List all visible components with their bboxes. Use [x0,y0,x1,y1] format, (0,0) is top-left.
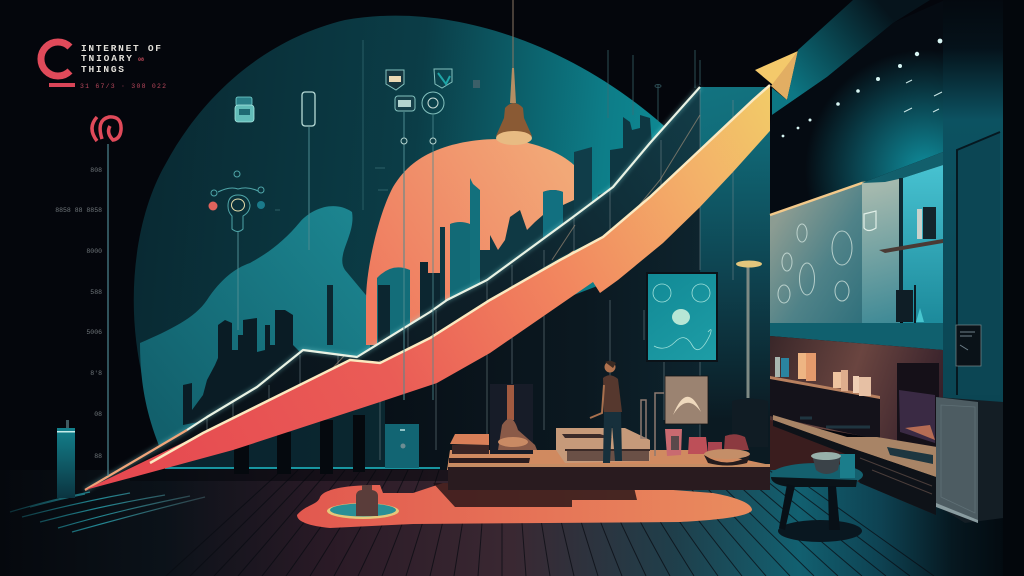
fireplace figure [490,384,537,454]
left teal column bar [57,420,75,498]
floor boards [166,470,934,576]
phone icon [302,92,315,250]
title [81,43,161,75]
orange floor rug [297,483,752,528]
glowing line chart [85,87,700,490]
dark wall beneath the arrow [165,200,700,470]
sensor icons cluster [275,40,452,400]
floor lines left [10,492,205,532]
title: INTERNET OF [81,43,161,54]
title: 08 [138,57,144,63]
wall control box [956,325,981,366]
title: THINGS [81,64,124,75]
big teal circle backdrop [134,16,700,470]
floor lamp [732,260,768,447]
tan wall poster [665,376,708,424]
right-hand column and door [943,0,1024,576]
arrowhead [755,51,798,100]
axis labels: 08 [94,411,102,418]
city skyline: left [183,310,310,425]
pendant lamp [496,0,532,145]
router icon [235,97,254,122]
small grey square pin [473,80,480,88]
wall screen [897,363,939,447]
wall grid lines [207,90,733,460]
teacup [811,452,855,478]
room ceiling with lights [770,0,945,215]
decorative stand frame [641,393,664,456]
teal base speckle strip [165,395,440,474]
standing man [590,361,622,463]
upper chart sticks [608,50,700,122]
sideboard [773,415,937,515]
coffee table on stage [704,449,750,466]
axis labels: 8000 [86,248,102,255]
counter band [770,323,943,350]
round side table [771,452,863,542]
thin diagonal trend line [310,115,700,392]
axis labels [55,167,102,460]
frosted wall panel with icons [770,182,885,323]
axis labels: 8'8 [90,370,102,377]
axis labels: 88 [94,453,102,460]
teal safe box [385,424,419,468]
lit alcove with devices [879,165,943,323]
tall teal tower [700,87,770,407]
cabinet [936,397,1003,523]
at-sign icon [92,117,121,141]
teal wall poster [646,272,718,362]
brown floor patch [770,418,936,515]
vertical axis [55,144,108,476]
lower wall and shelf [770,336,943,450]
tray with jar [327,485,399,519]
tower lower section [700,125,770,470]
platform stage [447,450,770,490]
floor wall-base shadow [130,469,770,481]
desk block [556,428,650,463]
hub device icon [208,171,265,330]
orange sun circle [366,139,574,345]
platform shadow on rug [433,483,637,507]
sofa [449,434,530,463]
subtitle: 31 67/3 · 308 022 [80,83,166,90]
growth arrow [85,51,798,490]
axis labels: 588 [90,289,102,296]
upper-right teal ceiling band [772,0,930,115]
logo mark [41,42,75,87]
red gift bags [665,429,749,456]
dark band between line and arrow [85,87,700,490]
city skyline: centre and right [327,115,652,350]
floor [0,470,1024,576]
side wall and soffit [862,152,943,323]
axis labels: 8858 88 8858 [55,207,102,214]
title: TNIOARY [81,53,132,64]
lighter teal wave [140,206,370,470]
axis labels: 808 [90,167,102,174]
axis labels: 5006 [86,329,102,336]
